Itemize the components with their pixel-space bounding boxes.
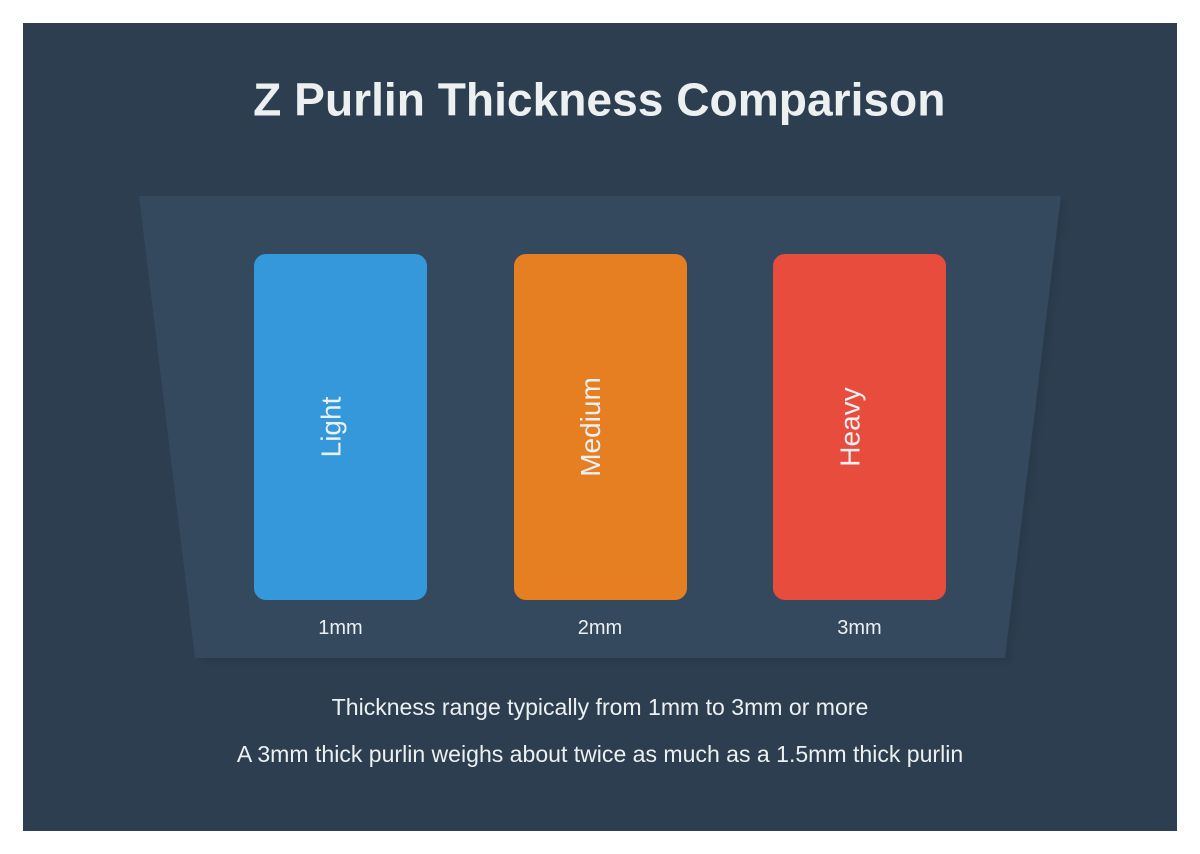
note: thickness range: Thickness range typically from 1mm to 3mm or more [332,694,868,720]
bar: light 1mm [254,254,427,639]
title: Z Purlin Thickness Comparison [253,74,945,126]
bar: light 1mm: Light [316,396,346,457]
bar: heavy 3mm: 3mm [837,617,882,639]
bar: medium 2mm: 2mm [578,617,622,639]
bar: heavy 3mm [773,254,946,639]
note: weight comparison: A 3mm thick purlin weighs about twice as much as a 1.5mm thick purlin [237,741,963,767]
bar: heavy 3mm: Heavy [834,387,866,467]
bar: medium 2mm: Medium [575,377,606,477]
bar: medium 2mm [514,254,687,639]
panel: trapezoid comparison area [139,196,1066,662]
bar: light 1mm: 1mm [318,617,363,639]
